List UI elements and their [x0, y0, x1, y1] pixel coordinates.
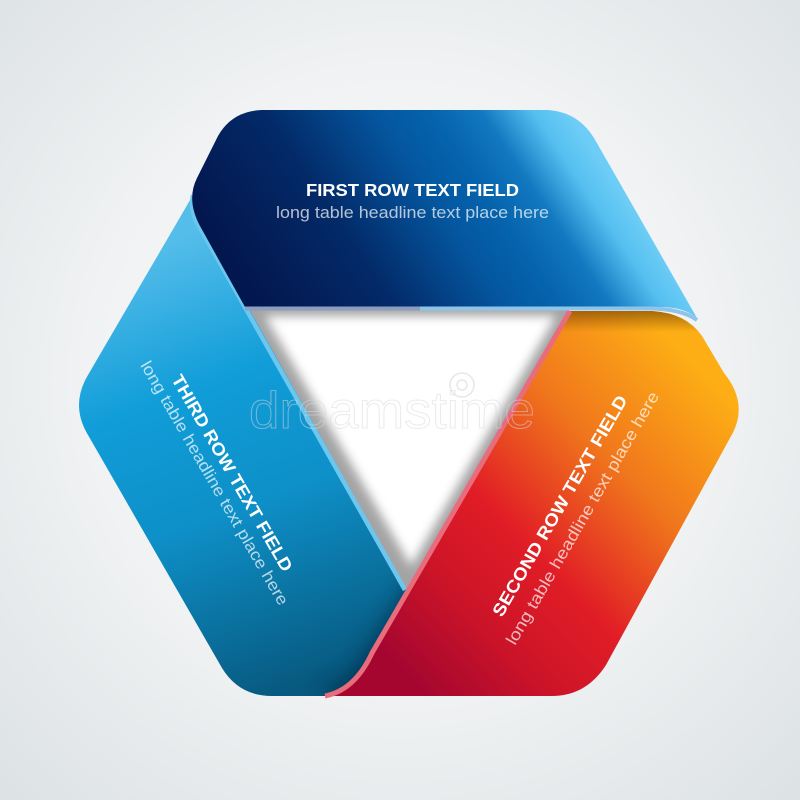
red ribbon lip — [325, 311, 570, 696]
panel: third row (blue, left) — [79, 194, 406, 696]
second row heading: SECOND ROW TEXT FIELD — [488, 392, 631, 620]
blue ribbon lip — [192, 195, 405, 590]
third row heading: THIRD ROW TEXT FIELD — [168, 371, 297, 575]
second row subtitle: long table headline text place here — [503, 389, 663, 648]
panel: first row (dark blue, top) — [192, 110, 697, 320]
watermark: dreamstime — [249, 382, 535, 440]
panel: second row (red-orange, right) — [325, 311, 739, 696]
top ribbon lip — [245, 308, 697, 320]
third row subtitle: long table headline text place here — [137, 358, 292, 609]
first row heading: FIRST ROW TEXT FIELD — [306, 180, 519, 200]
center triangle with inner shadow — [245, 305, 572, 592]
first row subtitle: long table headline text place here — [276, 204, 549, 222]
